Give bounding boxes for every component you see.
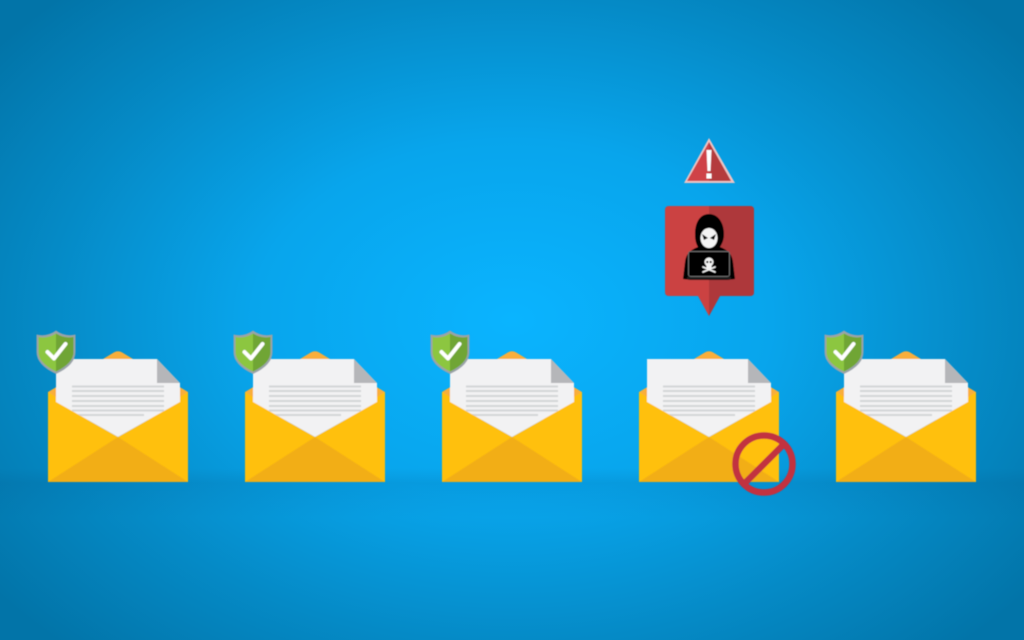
icon: green shield check 3: [430, 330, 470, 374]
icon: green shield check 1: [36, 330, 76, 374]
icon: hooded hacker: [683, 214, 735, 280]
email 2: verified envelope: [234, 330, 385, 482]
icon: green shield check 5: [824, 330, 864, 374]
icon: laptop with skull: [687, 252, 731, 280]
icon: warning triangle: [684, 138, 735, 183]
email 5: verified envelope: [824, 330, 976, 482]
envelope row: [36, 138, 976, 492]
callout: hacker alert pin: [665, 206, 754, 316]
email 1: verified envelope: [36, 330, 188, 482]
email 4: blocked envelope: [639, 351, 779, 482]
icon: prohibited sign: [736, 436, 792, 492]
icon: green shield check 2: [234, 330, 272, 374]
email 3: verified envelope: [430, 330, 582, 482]
floor shadow band: [0, 468, 1024, 518]
